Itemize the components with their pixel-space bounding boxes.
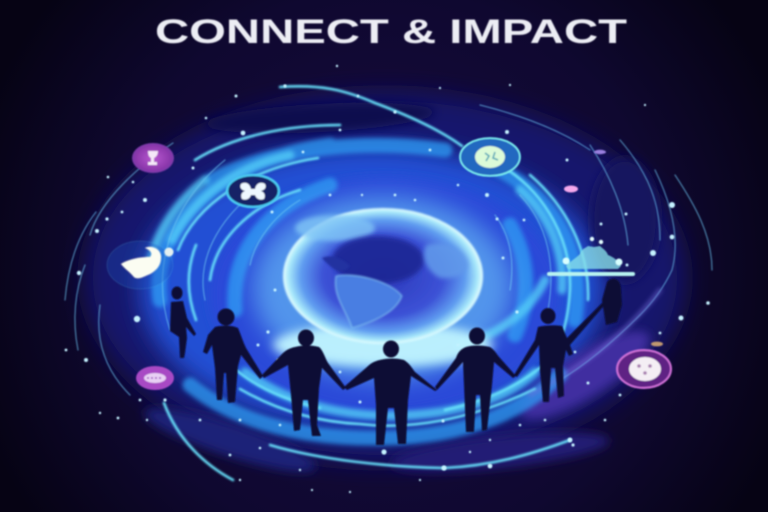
swirl rings [65, 86, 712, 480]
person 5 [514, 298, 609, 402]
icon: purple ring badge [617, 350, 671, 388]
person 3: centre [344, 340, 437, 445]
person 4 [435, 328, 516, 432]
wide blue bands [159, 145, 577, 438]
icon: white bird [107, 241, 174, 289]
icon: city on platform [547, 237, 635, 276]
bright cyan arcs [164, 86, 588, 480]
people holding hands [170, 279, 622, 445]
icon: butterfly badge [227, 175, 279, 207]
person 2 [262, 330, 346, 436]
pink stars [564, 150, 663, 346]
dark navy patches and purple nebula [139, 98, 660, 483]
far right person [602, 279, 622, 325]
title: CONNECT & IMPACT [155, 13, 627, 51]
purple band on right [530, 290, 660, 395]
far left person [170, 286, 196, 358]
thin orbit arcs [65, 105, 712, 395]
icon: purple oval badge [136, 366, 174, 390]
icon: recycling badge [460, 138, 520, 176]
globe [253, 196, 513, 380]
icon: purple trophy badge [132, 143, 174, 173]
galaxy glow [85, 93, 685, 463]
stars [65, 65, 710, 493]
person 1 [203, 308, 263, 403]
continents [295, 215, 375, 241]
